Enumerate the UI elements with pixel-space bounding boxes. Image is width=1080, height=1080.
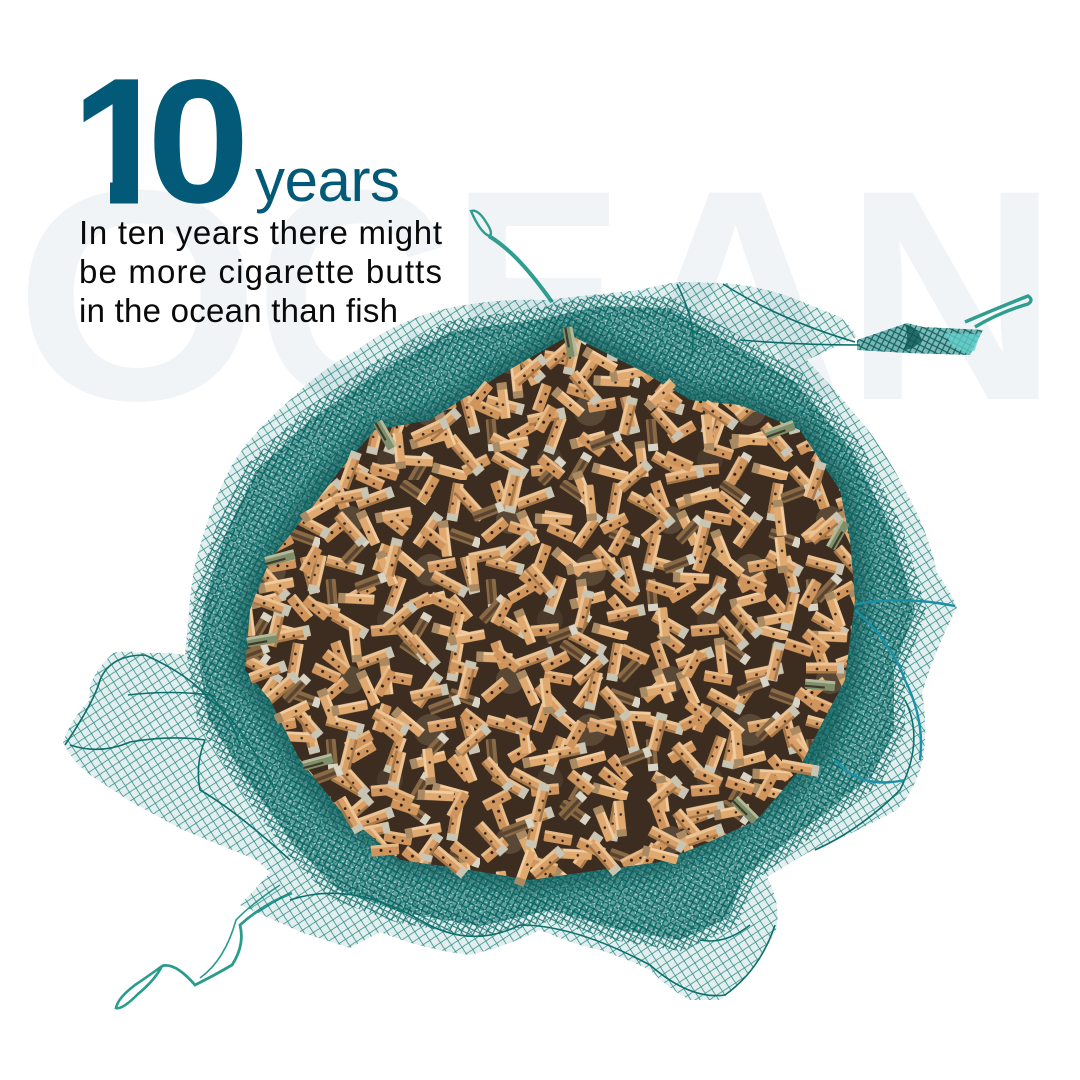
body text	[79, 214, 442, 329]
dense net ring	[198, 306, 915, 940]
body text: be more cigarette butts	[79, 253, 442, 290]
watermark word: OCEAN: C	[255, 127, 452, 463]
headline number	[84, 79, 242, 204]
illustration: fishing net with cigarette butts	[63, 211, 1031, 1008]
blue-green rope in net, right side	[835, 600, 955, 782]
headline number: 0	[147, 44, 250, 240]
butts sticking out along the pile edge	[246, 326, 850, 887]
body text: in the ocean than fish	[79, 292, 398, 329]
cigarette butt pile	[245, 326, 855, 887]
watermark word: OCEAN: O	[15, 129, 260, 463]
net shadow around pile	[232, 320, 870, 894]
watermark word: OCEAN: A	[625, 129, 846, 463]
outer net mesh	[63, 282, 957, 1000]
top-left rope loop	[471, 211, 552, 302]
bottom-left rope loop	[116, 885, 292, 1008]
headline number: 1	[73, 44, 171, 240]
watermark word: OCEAN: E	[451, 129, 624, 463]
watermark word: OCEAN: N	[844, 129, 1058, 463]
net folds	[65, 284, 914, 996]
watermark word: OCEAN	[15, 127, 1058, 463]
headline unit: years	[255, 147, 400, 214]
right rope, knot and tuft	[857, 296, 1031, 355]
body text: In ten years there might	[79, 214, 442, 251]
